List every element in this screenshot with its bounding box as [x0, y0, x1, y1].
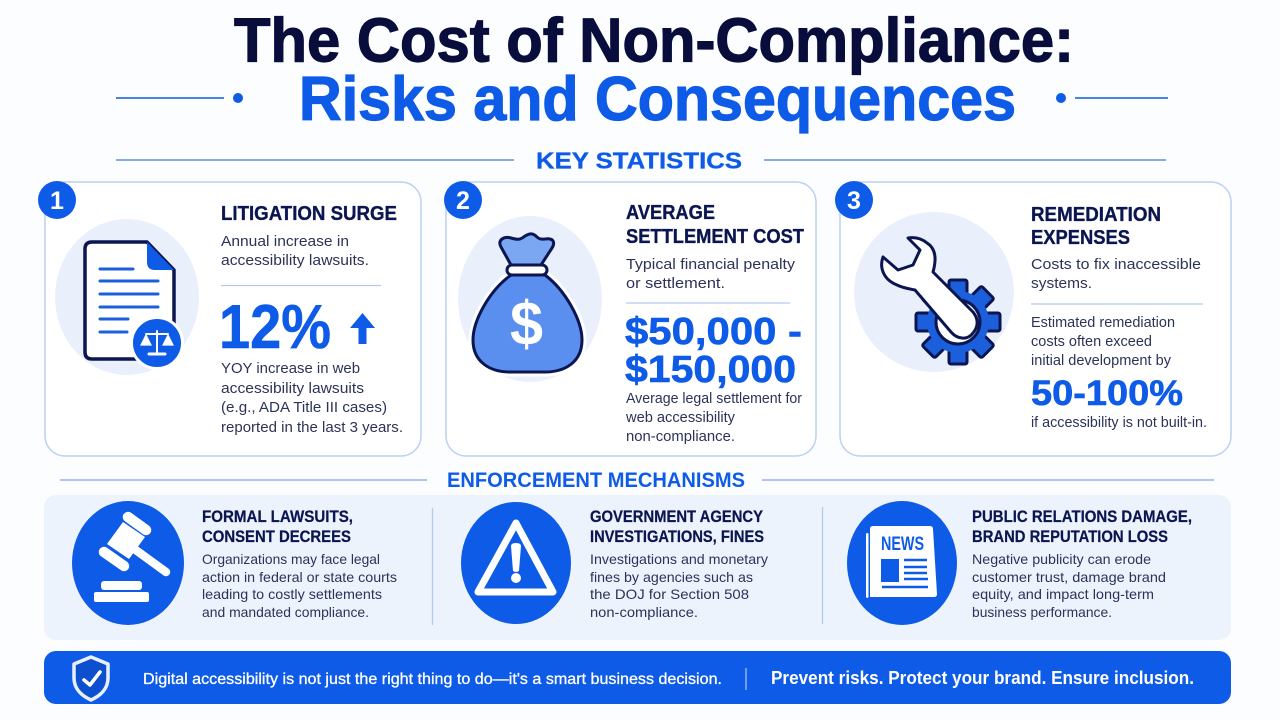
text: banner call to action: Prevent risks. Protect your brand. Ensure inclusion. [771, 668, 1194, 688]
text: remediation detail [1031, 315, 1175, 369]
text: settlement heading: SETTLEMENT COST [626, 226, 804, 248]
text: litigation surge detail: accessibility lawsuits [221, 381, 364, 397]
text: settlement heading: AVERAGE [626, 202, 715, 224]
text: settlement detail: Average legal settlement for [626, 391, 802, 407]
text: settlement detail: web accessibility [625, 410, 736, 426]
text: formal lawsuits body: and mandated compliance. [202, 604, 369, 620]
text: remediation heading: EXPENSES [1031, 227, 1130, 249]
text: settlement summary [626, 256, 796, 292]
text: remediation note: if accessibility is not built-in. [1031, 415, 1207, 431]
text: remediation summary [1031, 256, 1201, 292]
badge 2: 2 [456, 187, 470, 215]
callout: footer banner [44, 651, 1231, 704]
text: public relations body: customer trust, damage brand [972, 569, 1166, 585]
statistic: 50-100%: 50-100% [1031, 374, 1183, 413]
text: government agency body: non-compliance. [590, 604, 698, 620]
icon: money bag [458, 216, 602, 382]
icon: money bag: $ [510, 290, 543, 359]
text: formal lawsuits heading: CONSENT DECREES [202, 527, 351, 546]
icon: shield check [74, 657, 108, 700]
text: public relations body: business performance. [972, 604, 1112, 620]
badge 3: 3 [847, 187, 861, 215]
text: public relations body: Negative publicity can erode [972, 551, 1151, 567]
text: public relations heading [972, 507, 1192, 546]
text: remediation detail: costs often exceed [1031, 334, 1152, 350]
text: formal lawsuits body: Organizations may face legal [202, 551, 380, 567]
text: settlement summary: or settlement. [626, 275, 725, 292]
text: public relations body: equity, and impact long-term [972, 586, 1154, 602]
text: formal lawsuits body: action in federal or state courts [202, 569, 397, 585]
text: government agency heading: INVESTIGATIONS, FINES [590, 527, 764, 546]
text: litigation surge summary: Annual increase in [221, 233, 349, 250]
text: litigation surge detail: (e.g., ADA Title III cases) [221, 400, 387, 416]
icon: gavel [72, 501, 184, 625]
panel: litigation surge [38, 181, 421, 456]
text: settlement heading [626, 202, 804, 248]
text: litigation surge detail: reported in the last 3 years. [221, 420, 403, 436]
text: formal lawsuits body: leading to costly settlements [202, 586, 382, 602]
statistic: settlement range [625, 311, 802, 391]
title: The Cost of Non-Compliance: [234, 6, 1074, 76]
text: government agency heading [590, 507, 764, 546]
text: settlement summary: Typical financial penalty [626, 256, 796, 273]
text: remediation heading [1031, 204, 1161, 249]
icon: newspaper [847, 501, 957, 625]
text: litigation surge detail [221, 361, 403, 436]
text: remediation detail: Estimated remediation [1031, 315, 1175, 331]
statistic: settlement range: $150,000 [625, 349, 796, 391]
title [234, 6, 1074, 134]
text: remediation detail: initial development by [1031, 353, 1172, 369]
text: litigation surge summary: accessibility lawsuits. [221, 252, 369, 269]
panel: remediation expenses [835, 181, 1231, 456]
text: government agency body [590, 551, 768, 620]
panel: enforcement mechanisms [44, 495, 1231, 640]
icon: newspaper: NEWS [881, 534, 924, 555]
text: remediation summary: systems. [1031, 275, 1092, 292]
text: remediation heading: REMEDIATION [1031, 204, 1161, 226]
text: government agency heading: GOVERNMENT AGENCY [590, 507, 764, 526]
text: public relations heading: PUBLIC RELATIONS DAMAGE, [972, 507, 1192, 526]
text: formal lawsuits heading [202, 507, 353, 546]
text: settlement detail [625, 391, 802, 445]
badge 2 [444, 181, 482, 219]
text: public relations body [972, 551, 1166, 620]
text: litigation surge heading: LITIGATION SURGE [221, 203, 397, 225]
title: Risks and Consequences [299, 65, 1016, 134]
text: formal lawsuits heading: FORMAL LAWSUITS, [202, 507, 353, 526]
heading: key statistics: KEY STATISTICS [536, 148, 742, 174]
text: government agency body: fines by agencies such as [590, 569, 753, 585]
text: formal lawsuits body [202, 551, 397, 620]
badge 3 [835, 181, 873, 219]
icon: legal document [55, 219, 199, 375]
statistic: settlement range: $50,000 - [625, 311, 802, 353]
text: litigation surge summary [221, 233, 369, 269]
text: government agency body: the DOJ for Section 508 [590, 586, 749, 602]
panel: average settlement cost [444, 181, 816, 456]
text: remediation summary: Costs to fix inaccessible [1031, 256, 1201, 273]
text: settlement detail: non-compliance. [626, 429, 735, 445]
icon: up arrow [350, 313, 375, 344]
statistic: 12%: 12% [219, 293, 331, 362]
heading: enforcement mechanisms: ENFORCEMENT MECHANISMS [447, 469, 745, 492]
text: litigation surge detail: YOY increase in web [221, 361, 360, 377]
text: government agency body: Investigations and monetary [590, 551, 768, 567]
icon: warning triangle [461, 502, 571, 624]
icon: wrench and gear [854, 212, 1014, 372]
text: public relations heading: BRAND REPUTATION LOSS [972, 527, 1168, 546]
badge 1 [38, 181, 76, 219]
badge 1: 1 [50, 187, 64, 215]
text: banner message: Digital accessibility is not just the right thing to do—it's a smart business decision. [143, 671, 722, 688]
